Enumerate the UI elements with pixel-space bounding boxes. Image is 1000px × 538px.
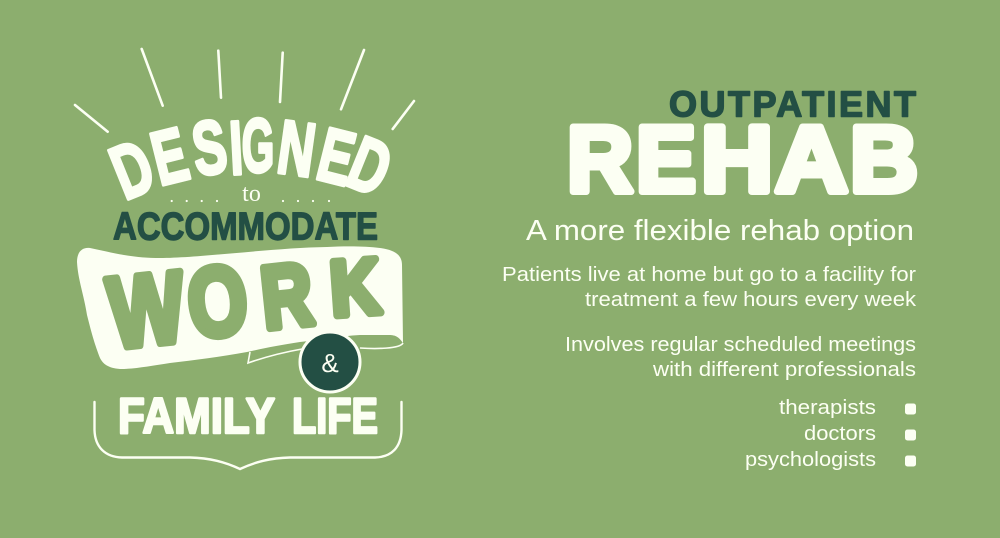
- icon: ampersand circle: &: [321, 348, 339, 378]
- heading: DESIGNED: D: [99, 123, 165, 216]
- icon: radiating rays: [75, 49, 414, 132]
- heading: REHAB: R: [567, 106, 633, 212]
- heading: DESIGNED: D: [337, 120, 403, 213]
- banner ribbon: [77, 246, 403, 369]
- list: professionals: psychologists: [745, 449, 876, 471]
- text: regular scheduled meetings: with different professionals: [652, 359, 916, 381]
- subheading: A more flexible rehab option: [526, 215, 914, 247]
- icon: ampersand circle: [300, 332, 360, 392]
- heading: FAMILY LIFE: FAMILY: [118, 388, 275, 444]
- list: professionals: doctors: [804, 423, 876, 445]
- heading: FAMILY LIFE: LIFE: [292, 388, 378, 444]
- heading: REHAB: [567, 106, 918, 212]
- panel: outpatient rehab description: [502, 84, 918, 471]
- list: professionals: [745, 397, 916, 471]
- heading: ACCOMMODATE: ACCOMMODATE: [113, 206, 378, 248]
- text: patients live at home: Patients live at home but go to a facility for: [502, 264, 916, 286]
- text: patients live at home: [502, 264, 917, 311]
- heading: REHAB: H: [701, 106, 773, 212]
- heading: DESIGNED: E: [143, 111, 196, 202]
- heading: WORK: K: [327, 241, 383, 333]
- heading: WORK: R: [256, 244, 317, 347]
- text: patients live at home: treatment a few hours every week: [585, 289, 917, 311]
- heading: DESIGNED: G: [242, 103, 274, 188]
- heading: REHAB: E: [636, 106, 696, 212]
- heading: REHAB: B: [850, 106, 918, 212]
- heading: WORK: [103, 241, 383, 370]
- heading: REHAB: A: [775, 106, 848, 212]
- bracket frame: [94, 402, 402, 469]
- heading: DESIGNED: S: [187, 103, 232, 192]
- heading: DESIGNED: E: [310, 112, 363, 202]
- heading: DESIGNED: N: [273, 104, 320, 193]
- heading: WORK: O: [182, 244, 253, 359]
- text: to: to: [242, 181, 261, 207]
- text: regular scheduled meetings: Involves regular scheduled meetings: [565, 334, 916, 356]
- heading: DESIGNED: I: [227, 106, 245, 191]
- heading: FAMILY LIFE: [118, 388, 378, 444]
- heading: OUTPATIENT: OUTPATIENT: [669, 84, 916, 124]
- text: regular scheduled meetings: [565, 334, 916, 381]
- dotted separators: [171, 200, 330, 202]
- list: professionals: therapists: [779, 397, 876, 419]
- heading: WORK: W: [103, 251, 190, 370]
- badge: designed to accommodate work and family life: [75, 49, 414, 469]
- heading: DESIGNED: [99, 103, 403, 216]
